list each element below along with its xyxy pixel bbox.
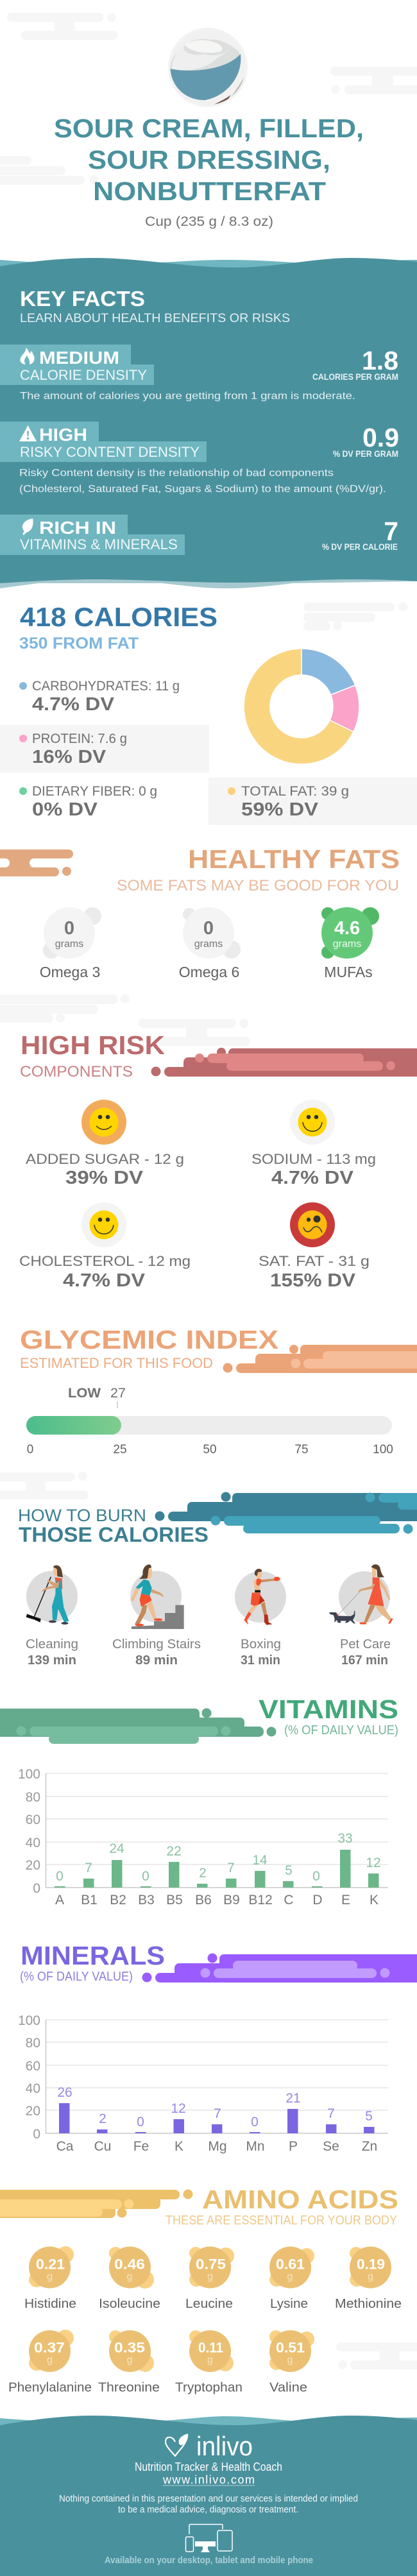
metric: percent DV per gram: % DV PER GRAM (333, 448, 398, 459)
amino acid: leucine (185, 2247, 234, 2311)
amino acid: lysine: 0.61 (276, 2256, 305, 2273)
bar chart: vitamins: B9 (223, 1893, 240, 1907)
legend: carbohydrates (19, 679, 180, 715)
bar chart: minerals (18, 2013, 388, 2154)
amino acid: tryptophan: 0.11 (198, 2339, 223, 2356)
calorie density description: The amount of calories you are getting from 1 gram is moderate. (20, 391, 355, 402)
donut chart (244, 649, 359, 764)
glycemic value: LOW (68, 1386, 101, 1401)
omega 3 (40, 907, 101, 980)
bar chart: minerals: 100 (18, 2013, 40, 2028)
bar chart: vitamins: 0 (142, 1869, 149, 1884)
omega 3: 0 (64, 918, 74, 939)
panel: glycemic index (20, 1325, 417, 1456)
legend: protein: PROTEIN: 7.6 g (32, 731, 127, 746)
omega 6: Omega 6 (179, 964, 239, 980)
MUFAs: MUFAs (324, 964, 373, 980)
banner: healthy fats (0, 849, 73, 876)
banner: minerals (142, 1953, 417, 1983)
legend: dietary fiber (19, 784, 157, 820)
saturated fat: 155% DV (270, 1270, 356, 1291)
bar chart: vitamins: B3 (138, 1893, 155, 1907)
banner: burn calories (155, 1492, 417, 1533)
amino acid: phenylalanine (8, 2330, 92, 2394)
metric: percent DV per gram: 0.9 (362, 423, 399, 452)
metric: percent DV per calorie: % DV PER CALORIE (322, 542, 398, 552)
activity label: cleaning: 139 min (28, 1653, 76, 1668)
icon: warning (19, 425, 37, 441)
bar chart: minerals: Zn (362, 2139, 377, 2154)
metric: percent DV per calorie (322, 516, 398, 552)
amino acid: isoleucine: Isoleucine (99, 2296, 160, 2311)
bar chart: minerals: P (289, 2139, 298, 2154)
bar chart: vitamins: 0 (312, 1869, 320, 1884)
bar chart: vitamins: B5 (166, 1893, 183, 1907)
added sugar (26, 1100, 184, 1188)
bar chart: minerals: 80 (26, 2036, 40, 2051)
panel: calories (0, 602, 417, 825)
activity: cleaning (26, 1565, 78, 1625)
panel: minerals (18, 1941, 417, 2154)
added sugar: ADDED SUGAR - 12 g (26, 1151, 184, 1167)
omega 3: grams (55, 939, 83, 950)
amino acid: leucine: 0.75 (196, 2256, 226, 2273)
healthy fats heading: HEALTHY FATS (188, 844, 400, 874)
key facts heading: KEY FACTS (20, 287, 145, 311)
legend: dietary fiber: 0% DV (32, 799, 98, 820)
burn heading: THOSE CALORIES (19, 1523, 208, 1546)
glycemic axis: 50 (203, 1443, 217, 1456)
activity label: climbing stairs: Climbing Stairs (112, 1637, 201, 1651)
metric: percent DV per gram (333, 423, 399, 459)
website link: www.inlivo.com (162, 2473, 255, 2486)
badge: high risky content density: HIGH (39, 425, 87, 445)
bar chart: minerals: 7 (214, 2106, 221, 2121)
high risk subheading: COMPONENTS (20, 1063, 133, 1080)
risky content description (19, 468, 386, 495)
bar chart: vitamins: 0 (56, 1869, 64, 1884)
disclaimer (59, 2494, 358, 2515)
title: SOUR CREAM, FILLED, (54, 114, 364, 143)
bar chart: minerals: 26 (57, 2085, 72, 2100)
bar chart: vitamins: E (341, 1893, 350, 1907)
icon: devices (186, 2524, 232, 2552)
amino acid: isoleucine (99, 2247, 160, 2311)
bar chart: vitamins: 20 (26, 1858, 40, 1873)
glycemic axis: 0 (27, 1443, 33, 1456)
vitamins subheading: (% OF DAILY VALUE) (284, 1723, 398, 1737)
amino acid: lysine: g (287, 2271, 293, 2282)
sodium: 4.7% DV (271, 1168, 354, 1188)
activity label: pet care: Pet Care (340, 1637, 391, 1651)
amino acid: valine: 0.51 (276, 2339, 305, 2356)
amino acid: histidine (24, 2246, 76, 2311)
title (54, 114, 364, 206)
burn heading: HOW TO BURN (18, 1506, 146, 1525)
amino acid: isoleucine: g (127, 2271, 132, 2282)
amino acid: phenylalanine: Phenylalanine (8, 2380, 92, 2394)
activity: climbing stairs (130, 1564, 184, 1629)
title: NONBUTTERFAT (93, 176, 326, 206)
bar chart: vitamins: K (370, 1893, 379, 1907)
saturated fat: SAT. FAT - 31 g (259, 1253, 370, 1269)
legend: protein (0, 725, 209, 772)
key facts subheading: LEARN ABOUT HEALTH BENEFITS OR RISKS (20, 311, 290, 325)
amino acid: lysine: Lysine (270, 2296, 308, 2311)
risky content description: Risky Content density is the relationship of bad components (19, 468, 334, 479)
legend: total fat: 59% DV (241, 799, 319, 820)
omega 6: 0 (203, 918, 214, 939)
added sugar: 39% DV (65, 1168, 144, 1188)
bar chart: minerals: Se (323, 2139, 339, 2154)
risky content description: (Cholesterol, Saturated Fat, Sugars & Sodium) to the amount (%DV/gr). (19, 484, 386, 495)
bar chart: minerals: Ca (56, 2139, 74, 2154)
glycemic subheading: ESTIMATED FOR THIS FOOD (20, 1355, 213, 1371)
badge: high risky content density (0, 422, 207, 462)
vitamins heading: VITAMINS (259, 1694, 398, 1724)
bar chart: vitamins: 0 (33, 1881, 40, 1896)
bar chart: minerals: 0 (33, 2127, 40, 2142)
activity label: cleaning: Cleaning (26, 1637, 78, 1651)
metric: calories per gram (312, 346, 398, 382)
disclaimer: Nothing contained in this presentation and our services is intended or implied (59, 2494, 358, 2504)
amino acid: histidine: 0.21 (36, 2256, 65, 2273)
bar chart: vitamins: B12 (248, 1893, 273, 1907)
icon: leaf (22, 518, 33, 535)
panel: amino acids (0, 2185, 402, 2394)
bar chart: vitamins: 40 (26, 1836, 40, 1850)
activity label: pet care (340, 1637, 391, 1668)
amino acid: methionine: Methionine (335, 2296, 402, 2311)
logo: inlivo: inlivo (196, 2431, 253, 2461)
panel: high risk components (19, 1030, 417, 1291)
icon: flame (20, 348, 35, 364)
banner: high risk (151, 1048, 417, 1077)
glycemic value: 27 (110, 1386, 126, 1401)
glycemic axis: 75 (294, 1443, 309, 1456)
amino acid: histidine: Histidine (24, 2296, 76, 2311)
activity label: boxing: 31 min (241, 1653, 280, 1668)
bar chart: vitamins: 14 (252, 1853, 268, 1868)
bar chart: vitamins: 33 (337, 1831, 353, 1846)
cholesterol: 4.7% DV (63, 1270, 146, 1291)
bar chart: vitamins: 7 (85, 1861, 92, 1875)
legend: dietary fiber: DIETARY FIBER: 0 g (32, 784, 157, 799)
bar chart: vitamins: A (55, 1893, 64, 1907)
bar chart: vitamins: C (284, 1893, 294, 1907)
legend: total fat: TOTAL FAT: 39 g (241, 784, 349, 799)
activity label: pet care: 167 min (341, 1653, 388, 1668)
amino acid: phenylalanine: 0.37 (34, 2339, 65, 2356)
bar chart: minerals: 12 (171, 2101, 186, 2116)
amino acid: tryptophan (175, 2330, 243, 2394)
bar chart: minerals: 40 (26, 2081, 40, 2096)
badge: medium calorie density: MEDIUM (39, 348, 119, 368)
bar chart: vitamins: 100 (18, 1767, 40, 1782)
bar chart: minerals: K (174, 2139, 183, 2154)
bar chart: vitamins: 5 (285, 1863, 293, 1878)
amino acid: tryptophan: Tryptophan (175, 2380, 243, 2394)
panel: footer (0, 2416, 417, 2576)
bar chart: vitamins: B2 (110, 1893, 126, 1907)
badge: medium calorie density: CALORIE DENSITY (20, 367, 147, 383)
glycemic axis: 100 (373, 1443, 393, 1456)
amino acids heading: AMINO ACIDS (202, 2185, 398, 2214)
bar chart: minerals: 0 (137, 2115, 144, 2129)
high risk heading: HIGH RISK (21, 1030, 165, 1060)
badge: medium calorie density (0, 345, 154, 385)
cholesterol (19, 1202, 191, 1291)
amino acid: leucine: Leucine (185, 2296, 233, 2311)
disclaimer: to be a medical advice, diagnosis or treatment. (118, 2505, 298, 2515)
bar chart: minerals: 0 (251, 2115, 259, 2129)
bar chart: minerals: 21 (285, 2091, 301, 2106)
activity label: boxing (241, 1637, 281, 1668)
serving size: Cup (235 g / 8.3 oz) (145, 214, 273, 229)
amino acid: valine (269, 2330, 314, 2394)
saturated fat (259, 1202, 370, 1291)
amino acid: leucine: g (207, 2271, 213, 2282)
bar chart: vitamins: 80 (26, 1790, 40, 1805)
panel: vitamins (0, 1694, 398, 1907)
panel: how to burn calories (18, 1492, 417, 1668)
glycemic axis: 25 (113, 1443, 127, 1456)
legend: carbohydrates: CARBOHYDRATES: 11 g (32, 679, 180, 694)
amino acid: histidine: g (47, 2271, 53, 2282)
food image: bowl of sour cream (168, 28, 248, 107)
glycemic axis (27, 1443, 393, 1456)
amino acid: lysine (269, 2247, 314, 2311)
activity label: boxing: Boxing (241, 1637, 281, 1651)
bar chart: vitamins: B6 (195, 1893, 212, 1907)
metric: calories per gram: CALORIES PER GRAM (312, 371, 398, 382)
metric: calories per gram: 1.8 (362, 346, 398, 375)
bar chart: minerals: Cu (94, 2139, 111, 2154)
amino acid: valine: Valine (269, 2380, 307, 2394)
activity label: climbing stairs (112, 1637, 201, 1668)
minerals heading: MINERALS (21, 1941, 165, 1970)
bar chart: vitamins: 7 (227, 1861, 235, 1875)
amino acid: methionine: 0.19 (357, 2256, 385, 2273)
calories heading: 418 CALORIES (20, 602, 217, 632)
calories from fat: 350 FROM FAT (19, 635, 139, 653)
sodium: SODIUM - 113 mg (251, 1151, 376, 1167)
panel: key facts (0, 258, 417, 588)
title: SOUR DRESSING, (88, 145, 330, 175)
banner: glycemic index (223, 1345, 417, 1373)
activity: pet care (329, 1564, 393, 1625)
banner: vitamins (0, 1708, 276, 1744)
logo: inlivo (166, 2431, 253, 2461)
amino acid: isoleucine: 0.46 (114, 2256, 145, 2273)
omega 6 (179, 907, 241, 980)
panel: healthy fats (0, 844, 400, 980)
bar chart: minerals: 2 (99, 2111, 106, 2126)
tagline: Nutrition Tracker & Health Coach (135, 2461, 282, 2473)
sodium (251, 1100, 376, 1188)
banner: amino acids (0, 2189, 192, 2218)
cholesterol: CHOLESTEROL - 12 mg (19, 1253, 191, 1269)
amino acids subheading: THESE ARE ESSENTIAL FOR YOUR BODY (166, 2213, 397, 2228)
bar chart: vitamins: 12 (366, 1855, 381, 1870)
amino acid: threonine: Threonine (98, 2380, 160, 2394)
bar chart: minerals: Mg (208, 2139, 227, 2154)
amino acid: phenylalanine: g (47, 2355, 53, 2366)
bar chart: minerals: 20 (26, 2104, 40, 2119)
MUFAs: grams (333, 939, 361, 950)
minerals subheading: (% OF DAILY VALUE) (20, 1970, 133, 1984)
legend: total fat (208, 778, 417, 825)
amino acid: threonine: g (127, 2355, 132, 2366)
healthy fats subheading: SOME FATS MAY BE GOOD FOR YOU (117, 877, 399, 894)
amino acid: threonine: 0.35 (114, 2339, 145, 2356)
omega 3: Omega 3 (40, 964, 100, 980)
bar chart: vitamins: 22 (166, 1844, 182, 1859)
bar chart: vitamins (18, 1767, 388, 1907)
badge: high risky content density: RISKY CONTENT DENSITY (20, 444, 200, 460)
amino acid: methionine: g (368, 2271, 373, 2282)
amino acid: tryptophan: g (207, 2355, 213, 2366)
legend: carbohydrates: 4.7% DV (32, 694, 115, 715)
activity: boxing (235, 1569, 286, 1625)
badge: rich in vitamins and minerals: RICH IN (39, 518, 116, 538)
glycemic bar (26, 1416, 392, 1435)
glycemic heading: GLYCEMIC INDEX (20, 1325, 278, 1354)
legend: protein: 16% DV (32, 747, 106, 767)
burn heading (18, 1506, 208, 1546)
bar chart: vitamins: 60 (26, 1813, 40, 1827)
bar chart: minerals: 5 (365, 2109, 373, 2124)
amino acid: valine: g (287, 2355, 293, 2366)
bar chart: vitamins: B1 (81, 1893, 98, 1907)
metric: percent DV per calorie: 7 (384, 516, 398, 546)
badge: rich in vitamins and minerals: VITAMINS & MINERALS (20, 536, 178, 552)
bar chart: vitamins: 2 (199, 1866, 207, 1881)
omega 6: grams (194, 939, 223, 950)
activity label: cleaning (26, 1637, 78, 1668)
glycemic value (68, 1386, 126, 1408)
badge: rich in vitamins and minerals (0, 515, 185, 555)
amino acid: threonine (98, 2330, 160, 2394)
bar chart: vitamins: D (312, 1893, 323, 1907)
bar chart: minerals: 7 (327, 2106, 335, 2121)
availability note: Available on your desktop, tablet and mobile phone (105, 2555, 313, 2566)
activity label: climbing stairs: 89 min (135, 1653, 178, 1668)
bar chart: minerals: 60 (26, 2059, 40, 2074)
MUFAs: 4.6 (334, 918, 360, 939)
MUFAs (321, 907, 379, 980)
bar chart: minerals: Mn (246, 2139, 265, 2154)
bar chart: minerals: Fe (133, 2139, 149, 2154)
amino acid: methionine (335, 2247, 402, 2311)
bar chart: vitamins: 24 (109, 1841, 124, 1856)
